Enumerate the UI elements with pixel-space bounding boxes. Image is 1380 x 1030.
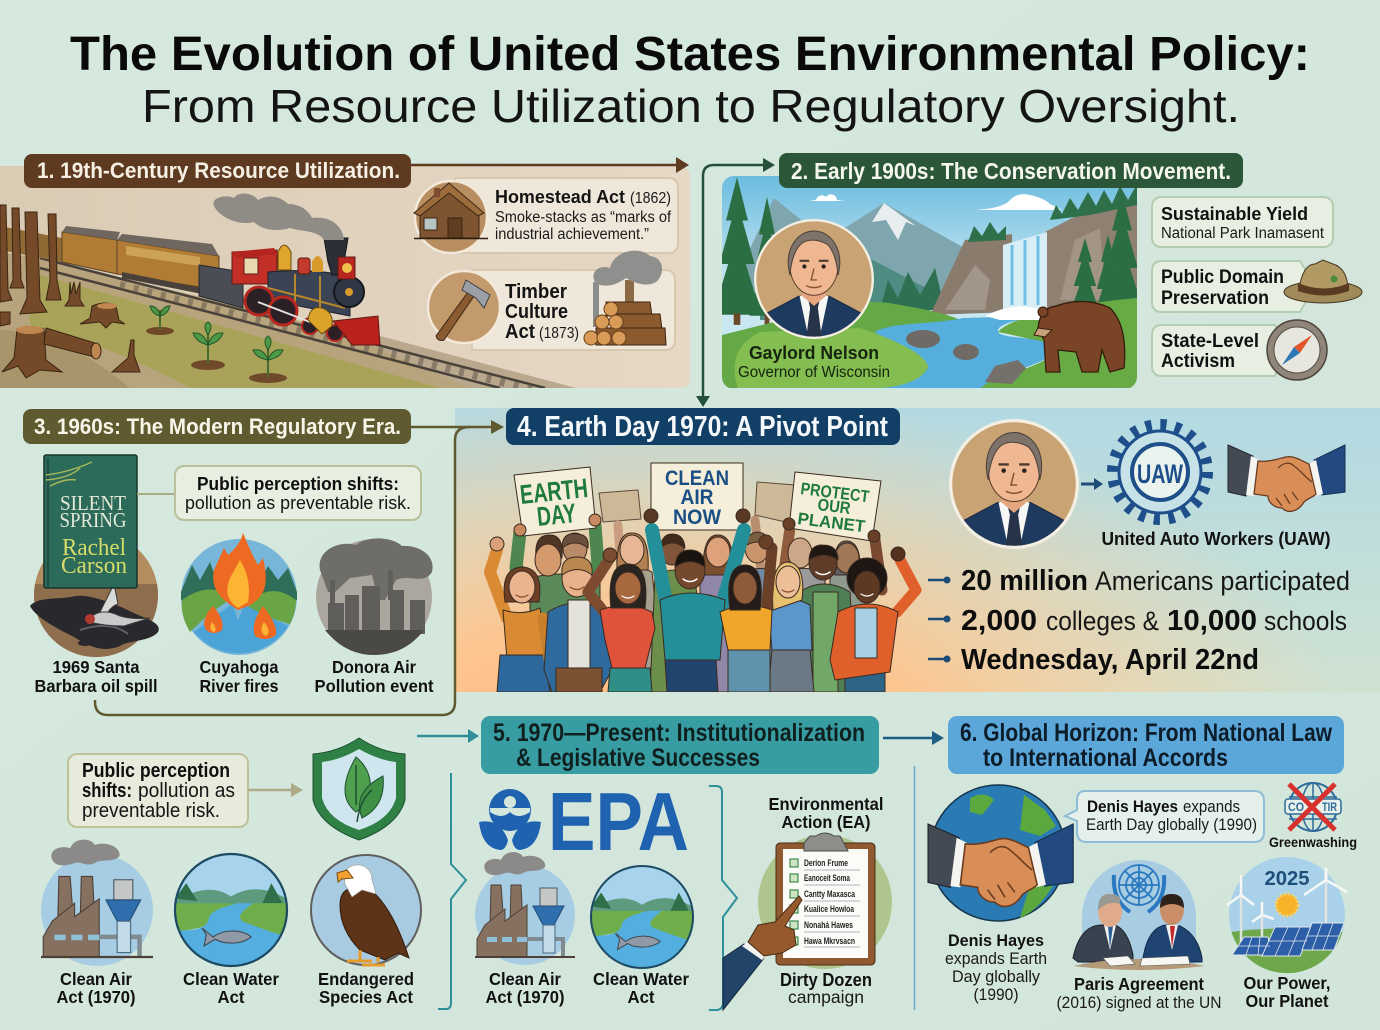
panel: 1 resource utilization: [0, 154, 690, 392]
arrow: into section 5: [417, 729, 479, 743]
callout: Denis Hayes expands: Earth Day globally (1990): [1086, 816, 1257, 834]
label: Denis Hayes: [945, 931, 1047, 1004]
checklist: Cantty Maxasca: [804, 889, 856, 900]
labels: acts: Act (1970): [486, 987, 564, 1007]
icon: greenwashing crossed out: CO: [1288, 802, 1304, 814]
stat: schools: 10,000: [1167, 605, 1257, 637]
icon: log cabin: [414, 183, 488, 238]
icon: axe: [436, 280, 490, 340]
card: Timber Culture Act: (1873): [539, 325, 579, 342]
sign: Earth Day: EARTH: [518, 473, 589, 510]
badge: section 5 heading: [481, 716, 879, 774]
label: Denis Hayes: Day globally: [952, 967, 1040, 986]
badge: section 3 heading: [23, 409, 411, 444]
stats list: [928, 565, 1350, 676]
label: Paris Agreement: [1056, 974, 1222, 1012]
label: Our Power, Our Planet: [1244, 973, 1330, 1011]
label: Gaylord Nelson: Gaylord Nelson: [749, 342, 879, 363]
labels: 1960s events: Pollution event: [314, 676, 434, 696]
badge: section 5 heading: 5. 1970—Present: Institutionalization: [493, 719, 865, 747]
icon: UAW gear logo: [1114, 426, 1206, 518]
icon: Silent Spring book: SILENT: [60, 491, 126, 515]
card: Public Domain Preservation: Public Domain: [1161, 267, 1284, 288]
callout: Denis Hayes expands: [1065, 791, 1264, 842]
sign: Earth Day: DAY: [535, 498, 577, 532]
card: Sustainable Yield: Sustainable Yield: [1161, 203, 1308, 224]
icon: UN emblem: [1114, 865, 1164, 912]
sign: Clean Air Now: [651, 463, 743, 530]
checklist: Kualice Howloa: [804, 904, 855, 915]
icon: UAW gear logo: UAW: [1137, 459, 1183, 489]
icon: clean water river: [175, 854, 287, 966]
person: blue woman: [768, 562, 814, 692]
icon: Donora smog: [316, 538, 433, 655]
logo: EPA: EPA: [548, 775, 689, 868]
card: Public Domain Preservation: Preservation: [1161, 288, 1269, 309]
callout: public perception repeat: pollution as: [138, 780, 235, 802]
card: State-Level Activism: Activism: [1161, 351, 1235, 372]
icon: river fire: [181, 533, 297, 655]
icon: pointing hand: [723, 896, 802, 1010]
badge: section 3 heading: 3. 1960s: The Modern Regulatory Era.: [34, 414, 401, 439]
stat: schools: colleges &: [1046, 606, 1159, 636]
person: denim man: [544, 557, 612, 692]
card: Timber Culture Act: Act: [505, 321, 535, 343]
card: Homestead Act: Homestead Act: [495, 186, 625, 207]
badge: section 4 heading: 4. Earth Day 1970: A Pivot Point: [517, 411, 888, 443]
title: The Evolution of United States Environmental Policy:: [70, 28, 1310, 81]
icon: Silent Spring book: Rachel: [62, 535, 126, 561]
card: Timber Culture Act: [428, 251, 675, 350]
label: Greenwashing: Greenwashing: [1269, 834, 1357, 850]
card: Timber Culture Act: Timber: [505, 281, 567, 303]
person: teal man: [644, 509, 750, 692]
icon: clean air factory: [475, 852, 575, 965]
card: Homestead Act: industrial achievement.”: [495, 226, 649, 243]
sign: blank right: [755, 482, 795, 523]
card: State-Level Activism: State-Level: [1161, 331, 1259, 352]
icon: Silent Spring book: [44, 455, 137, 588]
sign: Protect Our Planet: PROTECT: [800, 479, 871, 506]
label: Dirty Dozen: [780, 970, 872, 1007]
icon: compass: [1267, 320, 1327, 380]
title: From Resource Utilization to Regulatory Oversight.: [142, 80, 1240, 132]
arrow: to shield: [248, 783, 303, 797]
card: Timber Culture Act: Culture: [505, 301, 568, 323]
illustration: crowd with signs: [490, 463, 916, 692]
icon: greenwashing crossed out: [1285, 783, 1341, 831]
labels: laws: Species Act: [319, 987, 413, 1007]
label: Gaylord Nelson: [738, 342, 890, 381]
person: orange jacket: [830, 547, 916, 692]
arrow: section 2 down to section 4: [696, 158, 775, 407]
callout: public perception repeat: Public perception: [82, 760, 230, 782]
stat: date: Wednesday, April 22nd: [961, 644, 1259, 676]
portrait: Gaylord Nelson: [754, 219, 874, 339]
person: red woman: [588, 548, 655, 692]
person: green jacket man: [801, 544, 852, 692]
callout: public perception repeat: [68, 754, 248, 827]
badge: section 6 heading: to International Accords: [983, 744, 1228, 772]
icon: Silent Spring book: Carson: [61, 553, 127, 579]
icons: saplings: [146, 306, 287, 383]
panel: 5 institutionalization: [475, 716, 892, 1010]
callout: public perception: pollution as preventable risk.: [185, 493, 411, 513]
card: Public Domain Preservation: [1152, 260, 1362, 312]
labels: laws: Endangered: [318, 969, 414, 989]
checklist: Eanoceit Soma: [804, 873, 850, 884]
sign: Clean Air Now: NOW: [673, 506, 721, 529]
callout: public perception repeat: preventable risk.: [82, 800, 220, 822]
arrow: to section 2: [411, 157, 689, 173]
label: Denis Hayes: expands Earth: [945, 949, 1047, 968]
sign: Protect Our Planet: OUR: [817, 495, 852, 518]
hands on signs: [514, 514, 880, 542]
label: Gaylord Nelson: Governor of Wisconsin: [738, 364, 890, 381]
connector: section 3 to section 4: [95, 420, 504, 715]
labels: 1960s events: River fires: [200, 676, 279, 696]
badge: section 1 heading: 1. 19th-Century Resource Utilization.: [37, 158, 400, 183]
labels: acts: Clean Air: [489, 969, 561, 989]
panel: lower-left legislation: [41, 738, 421, 1007]
person: yellow woman: [720, 535, 773, 692]
back row people: [516, 520, 882, 692]
labels: laws: Clean Water: [183, 969, 279, 989]
panel: 3 modern regulatory era: [23, 409, 504, 715]
panel: 6 global horizon: [928, 716, 1357, 1012]
checklist: [804, 858, 856, 947]
icon: Dirty Dozen clipboard: [723, 833, 892, 1010]
stat: schools: schools: [1264, 606, 1347, 636]
icon: greenwashing crossed out: TIR: [1322, 802, 1338, 814]
icon: globe with handshake: [928, 785, 1073, 921]
checklist: Derion Frume: [804, 858, 848, 869]
badge: section 6 heading: [948, 716, 1344, 774]
label: Dirty Dozen: Dirty Dozen: [780, 970, 872, 990]
sign: Protect Our Planet: [789, 472, 881, 541]
icon: oil spill scene: [30, 533, 159, 657]
badge: section 2 heading: 2. Early 1900s: The Conservation Movement.: [791, 158, 1231, 184]
label: Environmental Action: Action (EA): [782, 812, 870, 832]
labels: acts: Clean Water: [593, 969, 689, 989]
labels: 1960s events: [34, 657, 434, 696]
label: Environmental Action: Environmental: [768, 794, 884, 814]
labels: laws: Act: [218, 987, 245, 1007]
icon: bear: [1034, 301, 1125, 372]
icon: Paris Agreement signing: [1073, 860, 1205, 970]
label: Our Power, Our Planet: Our Power,: [1244, 973, 1330, 993]
icon: oiled bird: [85, 584, 150, 626]
badge: section 1 heading: [24, 154, 411, 188]
labels: 1960s events: 1969 Santa: [52, 657, 140, 677]
label: Paris Agreement: (2016) signed at the UN: [1056, 993, 1222, 1012]
labels: laws: Clean Air: [60, 969, 132, 989]
bracket: EPA to campaign: [709, 786, 737, 1010]
labels: 1960s events: Barbara oil spill: [34, 676, 158, 696]
icon: smokestack and logs: [584, 251, 666, 345]
sign: Earth Day: [514, 467, 596, 536]
labels: 1960s events: Donora Air: [332, 657, 416, 677]
solar panels: [1232, 923, 1344, 956]
labels: laws: [56, 969, 414, 1007]
front row people: [490, 509, 916, 692]
card: Homestead Act: Smoke-stacks as “marks of: [495, 209, 672, 226]
label: Dirty Dozen: campaign: [788, 987, 864, 1007]
card: Homestead Act: (1862): [630, 190, 671, 207]
panel: 2 conservation movement: [713, 153, 1362, 389]
label: United Auto Workers: United Auto Workers (UAW): [1102, 529, 1331, 549]
sign: Protect Our Planet: PLANET: [797, 509, 867, 536]
checklist: Nonahá Hawes: [804, 920, 853, 931]
icon: Silent Spring book: SPRING: [60, 508, 126, 532]
bracket: left of section 5: [438, 773, 466, 1009]
icon: clean water river: [591, 866, 693, 968]
illustration: train and cleared land: [0, 194, 576, 392]
callout: public perception: Public perception shifts:: [197, 474, 399, 494]
callout: public perception: [137, 466, 421, 520]
callout: Denis Hayes expands: expands: [1183, 798, 1240, 816]
icon: clean air factory: [41, 840, 153, 966]
callout: Denis Hayes expands: Denis Hayes: [1087, 798, 1178, 816]
stat: schools: 2,000: [961, 605, 1037, 637]
person: orange woman: [490, 537, 552, 692]
stat: participants: 20 million: [961, 565, 1088, 597]
icon: renewable energy 2025: [1227, 857, 1347, 973]
icon: shield with leaves: [313, 738, 405, 840]
icon: bald eagle: [311, 855, 421, 965]
card: Homestead Act: [414, 178, 678, 253]
labels: acts: Act: [628, 987, 655, 1007]
badge: section 5 heading: & Legislative Successes: [516, 744, 760, 772]
icon: renewable energy 2025: 2025: [1264, 868, 1310, 890]
panel: 4 Earth Day: [455, 408, 1380, 692]
illustration: mountain landscape: [713, 176, 1144, 389]
sign: Clean Air Now: CLEAN: [665, 467, 729, 490]
stat: schools: [928, 605, 1347, 637]
labels: laws: Act (1970): [56, 987, 136, 1007]
icon: ranger hat: [1284, 260, 1362, 303]
stat: participants: Americans participated: [1095, 566, 1350, 596]
portrait: Gaylord Nelson with UAW: [949, 419, 1079, 549]
arrow: section 5 to section 6: [883, 731, 944, 745]
card: Sustainable Yield: National Park Inamasent: [1161, 225, 1325, 242]
sign: Clean Air Now: AIR: [680, 486, 714, 509]
labels: acts: [486, 969, 689, 1007]
logo: EPA: [479, 775, 689, 868]
card: Sustainable Yield: [1152, 197, 1333, 247]
title: [70, 28, 1310, 132]
label: Our Power, Our Planet: Our Planet: [1246, 991, 1329, 1011]
arrow: to UAW: [1081, 478, 1103, 490]
badge: section 2 heading: [779, 153, 1243, 188]
label: Paris Agreement: Paris Agreement: [1074, 974, 1204, 994]
icon: handshake: [1228, 445, 1345, 511]
stat: participants: [928, 565, 1350, 597]
labels: 1960s events: Cuyahoga: [200, 657, 279, 677]
trees: [713, 177, 1144, 327]
callout: public perception repeat: shifts:: [82, 780, 132, 802]
label: Environmental Action: [768, 794, 884, 832]
label: Denis Hayes: (1990): [974, 985, 1018, 1004]
sign: blank left: [599, 490, 641, 522]
checklist: Hawa Mkrvsacn: [804, 936, 855, 947]
label: Denis Hayes: Denis Hayes: [948, 931, 1044, 950]
card: State-Level Activism: [1152, 320, 1327, 380]
divider: [914, 766, 916, 1010]
icons: cut trunks: [0, 205, 140, 378]
